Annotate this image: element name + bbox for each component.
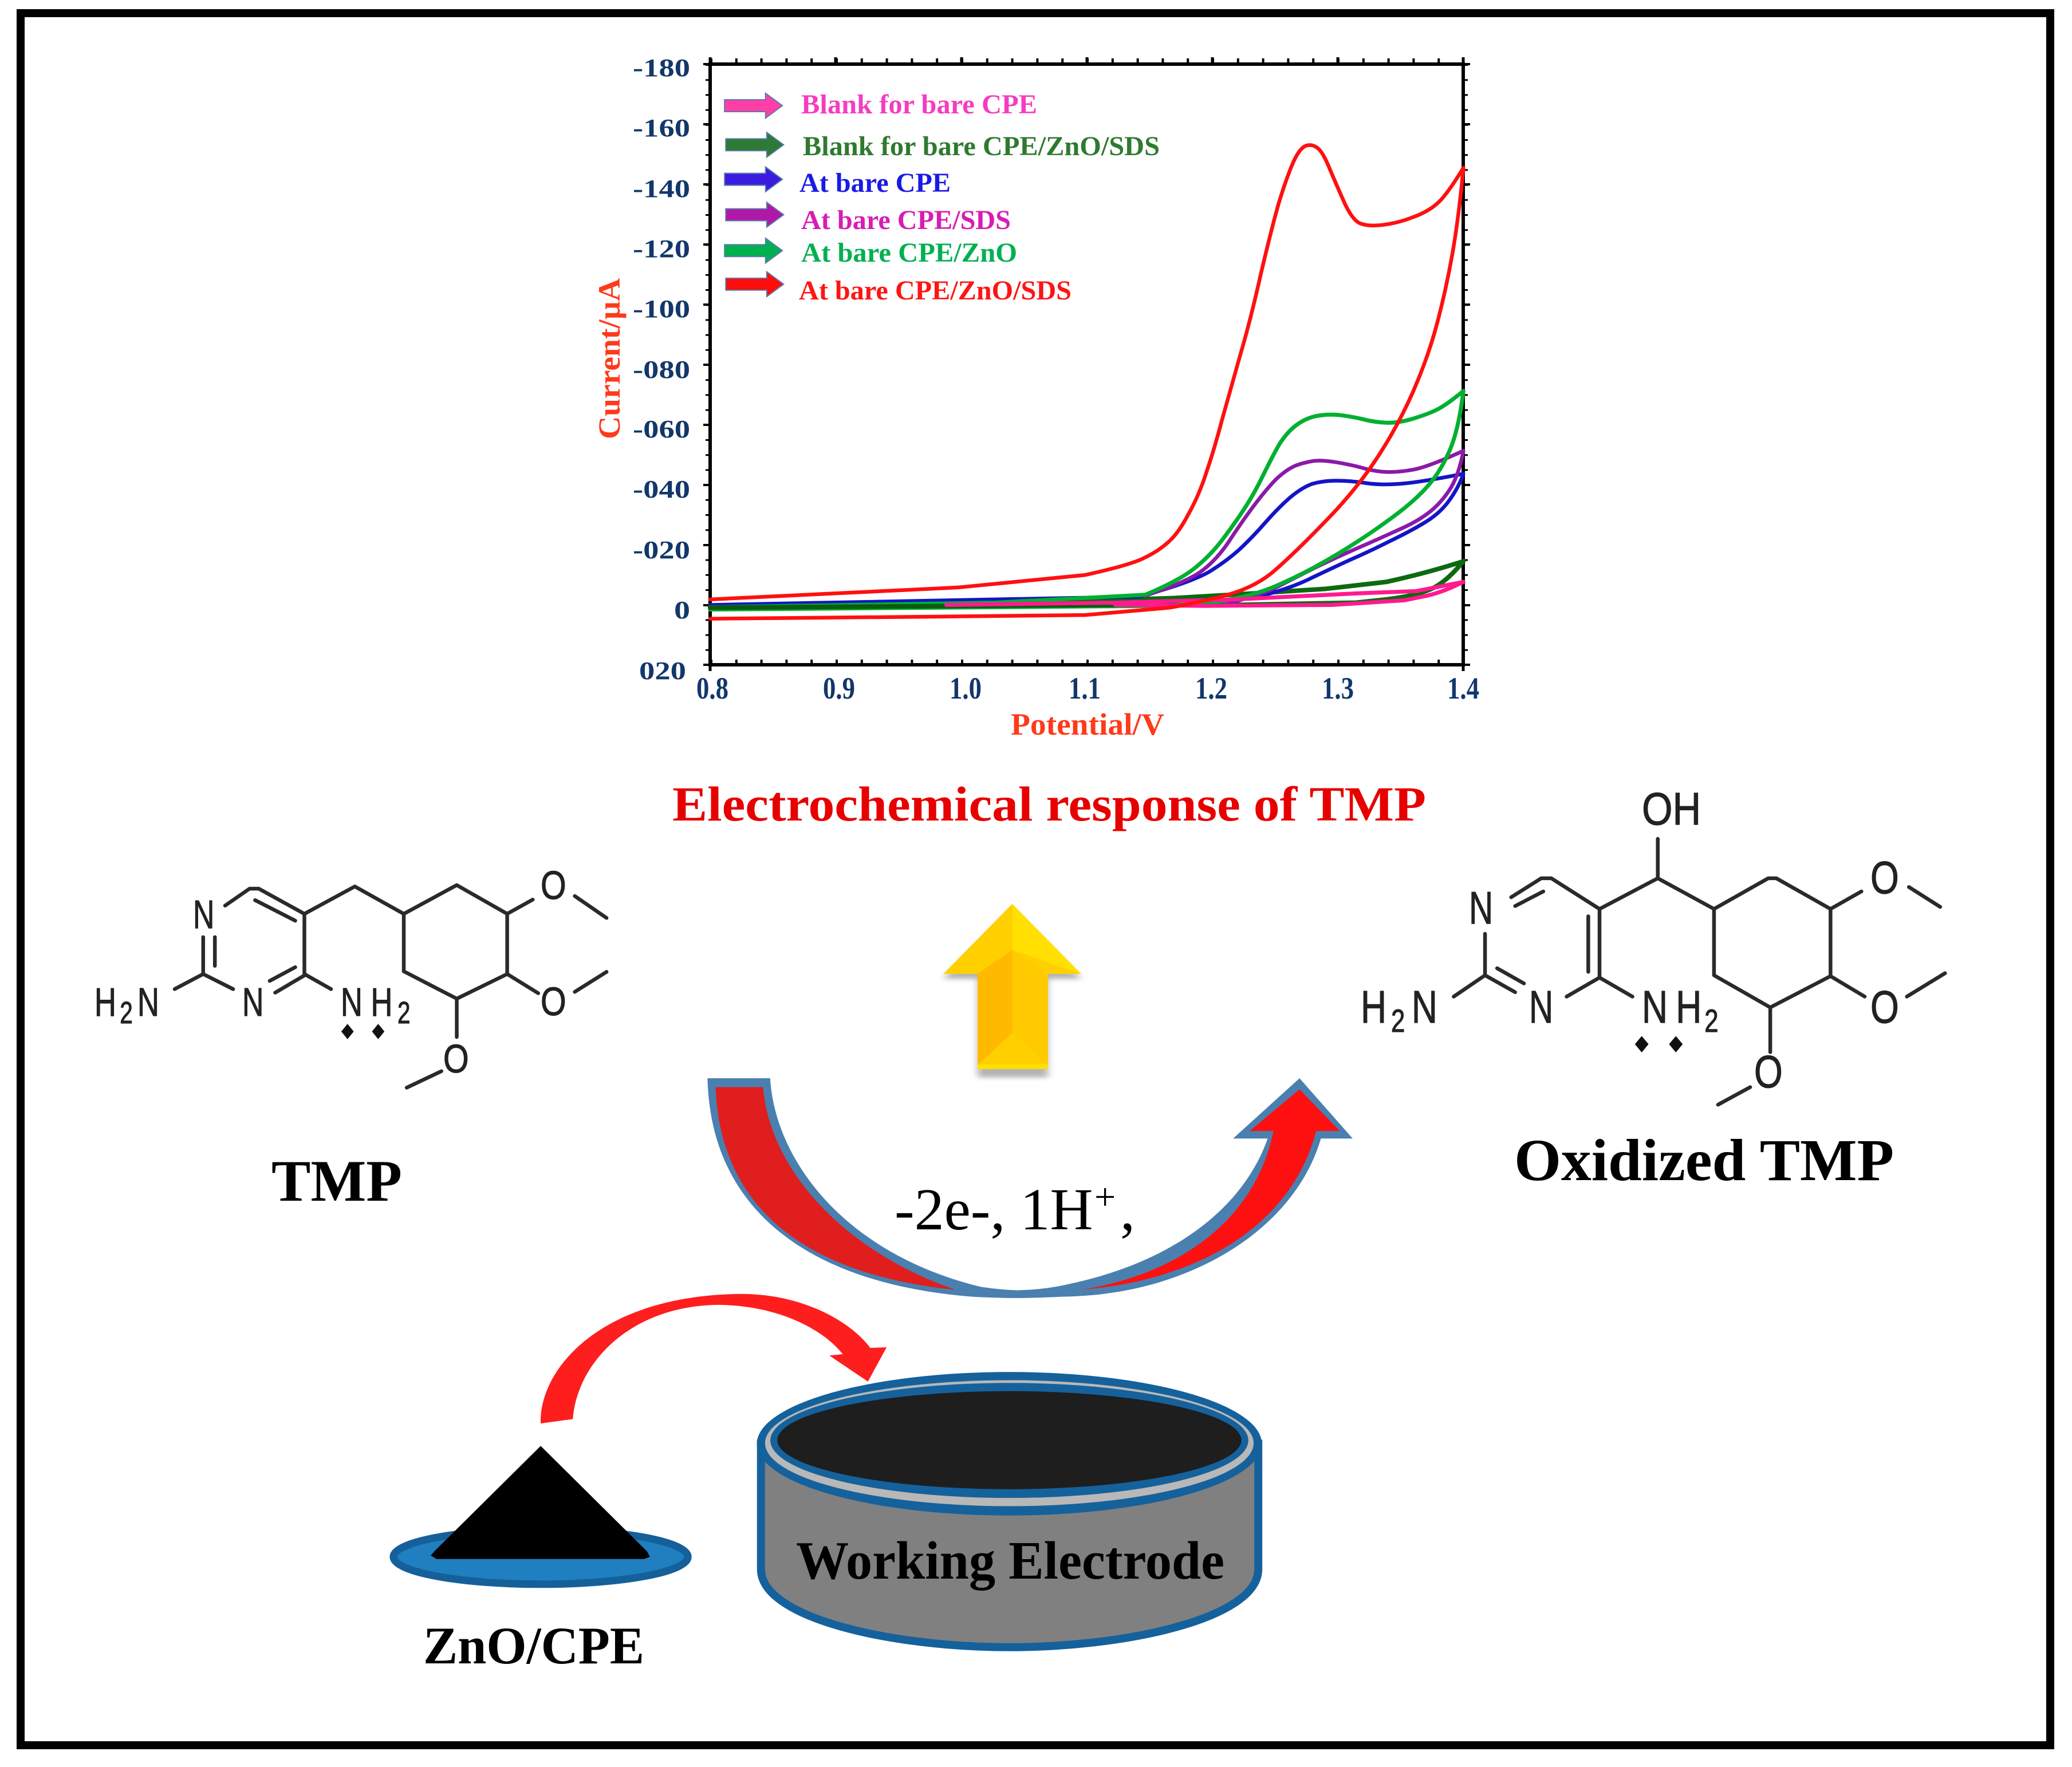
plot axes box (703, 57, 1470, 671)
legend labels: At bare CPE/SDS (801, 205, 1011, 235)
legend arrows (724, 93, 783, 297)
molecule: oxidized TMP structure: H (1361, 982, 1386, 1033)
curves (710, 145, 1463, 619)
x axis tick labels: 0.8 (696, 671, 728, 705)
legend labels: Blank for bare CPE (801, 89, 1037, 120)
y axis tick labels: -160 (633, 114, 690, 142)
x axis tick labels: 1.2 (1195, 671, 1227, 705)
y axis tick labels: -020 (633, 536, 690, 564)
molecule: oxidized TMP structure: N (1642, 982, 1668, 1033)
molecule: oxidized TMP structure: 2 (1704, 1003, 1718, 1039)
molecule: oxidized TMP structure: O (1754, 1046, 1783, 1098)
y axis tick labels: -040 (633, 475, 690, 503)
molecule: TMP structure: H (371, 980, 392, 1025)
molecule: oxidized TMP structure: N (1529, 981, 1553, 1032)
arrow: curved reaction arrow (707, 1078, 1353, 1298)
molecule: TMP structure: 2 (397, 996, 411, 1030)
y axis tick labels (633, 54, 690, 685)
legend labels: Blank for bare CPE/ZnO/SDS (803, 131, 1160, 161)
molecule: oxidized TMP structure: OH (1642, 783, 1701, 834)
legend labels: At bare CPE (799, 168, 951, 198)
molecule: TMP structure: N (193, 892, 214, 937)
legend labels (799, 89, 1160, 306)
molecule: oxidized TMP structure: 2 (1391, 1003, 1405, 1039)
label: Oxidized TMP: Oxidized TMP (1514, 1127, 1894, 1193)
chart: cyclic voltammograms (592, 54, 1479, 741)
legend labels: At bare CPE/ZnO (801, 238, 1017, 268)
molecule: TMP structure: N (341, 980, 363, 1025)
molecule: oxidized TMP structure: O (1870, 981, 1899, 1033)
y axis tick labels: -100 (633, 295, 690, 323)
x axis tick labels: 1.4 (1447, 671, 1479, 705)
y axis tick labels: -060 (633, 415, 690, 443)
y axis tick labels: -180 (633, 54, 690, 82)
molecule: TMP structure: O (541, 979, 566, 1024)
reaction label: + (1094, 1176, 1116, 1218)
molecule: TMP structure: H (94, 980, 116, 1025)
label: Working Electrode: Working Electrode (796, 1531, 1224, 1591)
molecule: oxidized TMP structure: N (1469, 882, 1493, 933)
legend (724, 89, 1160, 306)
x axis title: Potential/V (1011, 707, 1164, 741)
y axis tick labels: 0 (674, 596, 690, 624)
reaction label: -2e-, 1H (895, 1177, 1093, 1243)
reaction label: , (1120, 1177, 1135, 1243)
y axis tick labels: 020 (639, 657, 686, 685)
molecule: TMP structure: O (541, 863, 566, 908)
label: TMP: TMP (271, 1149, 402, 1214)
legend labels: At bare CPE/ZnO/SDS (799, 275, 1072, 306)
icon: working electrode cylinder (757, 1372, 1262, 1647)
molecule: oxidized TMP structure (1361, 783, 1945, 1105)
icon: ZnO/CPE powder on dish (393, 1446, 688, 1584)
x axis tick labels: 0.9 (823, 671, 855, 705)
y axis tick labels: -140 (633, 175, 690, 203)
x axis tick labels (696, 671, 1479, 705)
x axis tick labels: 1.0 (950, 671, 982, 705)
y axis tick labels: -120 (633, 235, 690, 263)
molecule: TMP structure: N (137, 980, 159, 1025)
x axis tick labels: 1.1 (1069, 671, 1101, 705)
molecule: TMP structure: 2 (120, 996, 133, 1030)
molecule: TMP structure: O (443, 1036, 469, 1081)
arrow: yellow up arrow (943, 904, 1081, 1078)
molecule: oxidized TMP structure: N (1412, 982, 1437, 1033)
molecule: TMP structure (94, 863, 606, 1088)
arrow: red arrow to electrode (541, 1294, 887, 1423)
label: ZnO/CPE: ZnO/CPE (423, 1616, 644, 1675)
molecule: TMP structure: N (242, 980, 263, 1025)
molecule: oxidized TMP structure: H (1676, 982, 1701, 1033)
y axis tick labels: -080 (633, 356, 690, 384)
molecule: oxidized TMP structure: O (1870, 852, 1899, 904)
x axis tick labels: 1.3 (1322, 671, 1354, 705)
y axis title: Current/µA (592, 278, 627, 439)
heading: electrochemical response: Electrochemical response of TMP (672, 776, 1426, 831)
